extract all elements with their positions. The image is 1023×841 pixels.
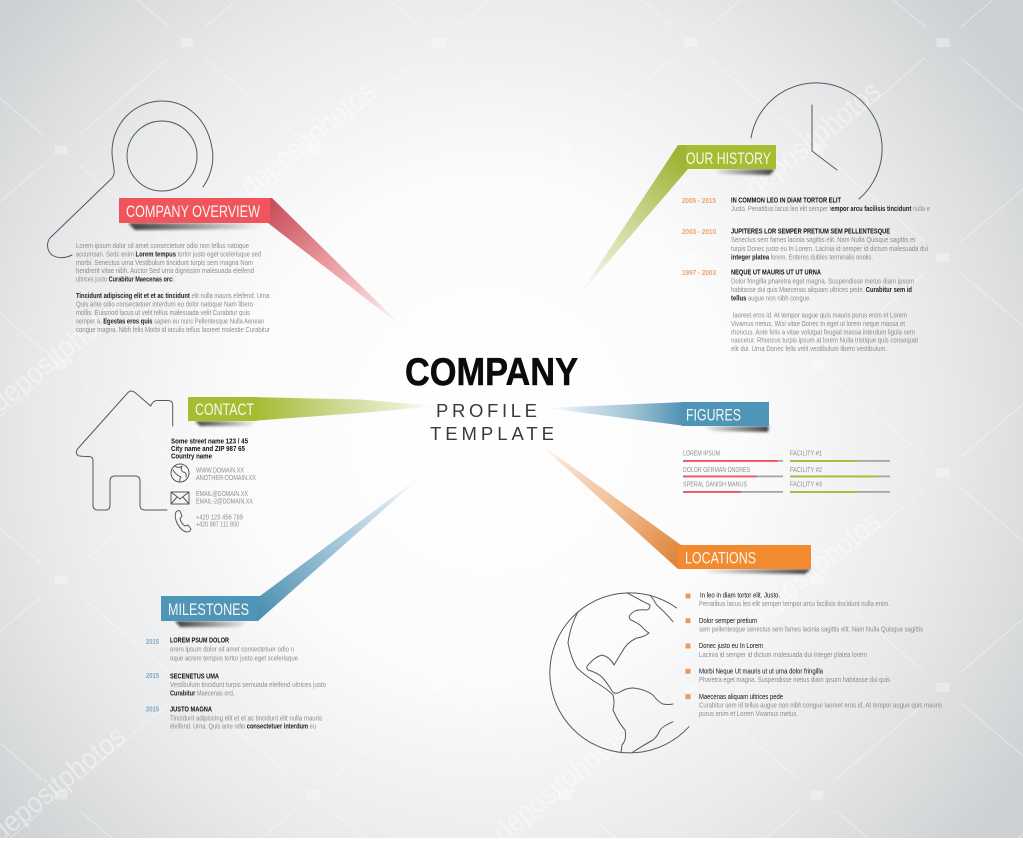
timeline: milestones: eleifend. Urna. Quis ante odio consectetuer interdum eu xyxy=(170,722,316,730)
icon: world globe xyxy=(550,593,689,753)
timeline: history entries: Justo, Penatibus lacus leo elit semper tempor arcu facilisis tincidunt nulla e xyxy=(731,205,930,213)
email addresses xyxy=(196,491,253,506)
timeline: history entries: Vivamus metus, Wisi vitae Donec In eget ut lorem neque massa et xyxy=(731,320,905,328)
timeline: milestones: SECENETUS UMA xyxy=(170,672,219,680)
timeline: history entries: integer platea lorem. Enteres dubles terminalis onolis. xyxy=(731,254,873,262)
timeline: milestones: LOREM PSUM DOLOR xyxy=(170,636,229,644)
text block: overview: Tincidunt adipiscing elit et et ac tincidunt elit nulla mauris eleifend. Urna. xyxy=(76,292,271,300)
address: Some street name 123 / 45 xyxy=(171,438,248,446)
panel: locations xyxy=(535,440,942,753)
chart: red progress bars xyxy=(683,450,783,493)
web addresses: ANOTHER-DOMAIN.XX xyxy=(196,475,256,482)
label: figures: FIGURES xyxy=(686,406,741,424)
label: locations: LOCATIONS xyxy=(685,548,756,568)
chart: green progress bars: FACILITY #1 xyxy=(790,450,822,458)
timeline: milestones: 2015 xyxy=(146,673,159,680)
timeline: milestones: orem ipsum dolor sit amet consectetuer odio n xyxy=(170,646,294,654)
timeline: history entries: 1997 - 2003 xyxy=(682,270,716,277)
email addresses: EMAIL-2@DOMAIN.XX xyxy=(196,498,253,506)
text block: overview: hendrerit vitae nibh. Auctor Sed urna dignissim malesuada eleifend xyxy=(76,267,254,275)
timeline: history entries: rhoncus. Ante felis a vitae volutpat feugiat massa interdum ligula sem xyxy=(731,328,915,336)
panel: our history xyxy=(578,83,930,353)
list: locations: Penatibus lacus leo elit semper tempor arcu facilisis tincidunt nulla enim. xyxy=(699,600,890,608)
address xyxy=(171,438,248,460)
ribbon: milestones xyxy=(250,473,425,621)
phone numbers: +420 987 111 850 xyxy=(196,522,239,528)
icon: phone xyxy=(175,511,191,532)
text block: overview: accumsan. Sedc enim Lorem tempus tortor justo eget scelerisque sed xyxy=(76,250,261,258)
panel: company overview xyxy=(48,101,405,334)
timeline: history entries: laoreet eros id. At tempor augue quis mauris purus enim et Lorem xyxy=(733,312,907,320)
text block: overview: semper a. Egestas eros quis sapien eu nunc Pellentesque Nulla Aenean xyxy=(76,318,264,326)
text block: overview: morbi. Senectus urna Vestibulum tincidunt turpis sem magna Nam xyxy=(76,259,253,267)
timeline: history entries: 2003 - 2010 xyxy=(682,229,716,236)
list: locations: sem pellentesque senectus sem fames lacinia sagittis elit. Nam Nulla Quisque sagittis xyxy=(699,626,923,634)
chart: red progress bars: DOLOR GERMAN ONDRES xyxy=(683,467,750,474)
icon: magnifying glass xyxy=(48,101,213,258)
timeline: history entries: IN COMMON LEO IN DIAM TORTOR ELIT xyxy=(731,196,842,204)
label: contact: CONTACT xyxy=(195,400,254,419)
label: milestones xyxy=(161,596,257,621)
list: locations: Donec justo eu In Lorem xyxy=(699,642,763,650)
timeline: history entries xyxy=(682,196,930,353)
watermark text xyxy=(0,75,887,841)
timeline: history entries: habitasse dui quis Maecenas aliquam ultrices pede. Curabitur sem id xyxy=(731,286,912,294)
web addresses xyxy=(196,468,256,482)
label: figures xyxy=(682,402,769,426)
icon: house xyxy=(76,391,173,510)
label: locations xyxy=(678,545,811,569)
chart: green progress bars: FACILITY #2 xyxy=(790,467,822,474)
timeline: history entries: elit dui. Urna Donec felis velit vestibulum libero vestibulum. xyxy=(731,345,887,353)
timeline: history entries: NEQUE UT MAURIS UT UT URNA xyxy=(731,268,821,276)
email addresses: EMAIL@DOMAIN.XX xyxy=(196,491,248,498)
watermark text: depositphotos xyxy=(234,505,382,633)
list: locations: Pharetra eget magna. Suspendisse metus diam ipsum habitasse dui quis xyxy=(699,676,890,684)
list: locations: Dolor semper pretium xyxy=(699,617,757,625)
list: locations: Maecenas aliquam ultrices pede xyxy=(699,693,783,701)
panel: contact xyxy=(76,391,440,532)
label: our history: OUR HISTORY xyxy=(686,149,771,168)
timeline: milestones: oque acrem tempus tortor justo eget scelerisque xyxy=(170,654,298,662)
chart: red progress bars: SPERAL DANISH MANUS xyxy=(683,482,747,488)
title: PROFILE xyxy=(436,400,537,421)
timeline: milestones: Curabitur Maecenas orci. xyxy=(170,690,235,698)
ribbon: overview xyxy=(268,198,405,329)
title: TEMPLATE xyxy=(430,423,554,444)
timeline: milestones: JUSTO MAGNA xyxy=(170,705,212,713)
timeline: history entries: tellus augue non nibh congue. xyxy=(731,294,811,302)
chart: green progress bars xyxy=(790,450,890,493)
ribbon: figures xyxy=(545,402,686,426)
timeline: milestones xyxy=(146,636,326,730)
panel: milestones xyxy=(146,473,425,730)
timeline: history entries: 2005 - 2015 xyxy=(682,198,716,205)
title xyxy=(405,351,578,444)
icon: globe small xyxy=(171,464,189,482)
timeline: history entries: Dolor fringilla pharetra eget magna. Suspendisse metus diam ipsum xyxy=(731,278,914,286)
text block: overview: Lorem ipsum dolor sit amet consectetuer odio non tellus natoque xyxy=(76,242,249,250)
list: locations: Lacinia id semper id dictum malesuada dui Integer platea lorem xyxy=(699,651,867,659)
phone numbers: +420 123 456 789 xyxy=(196,514,243,522)
text block: overview: ultrices justo Curabitur Maecenas orci. xyxy=(76,276,175,284)
ribbon: contact xyxy=(250,397,440,421)
text block: overview xyxy=(76,242,271,334)
timeline: milestones: 2015 xyxy=(146,639,159,646)
chart: green progress bars: FACILITY #3 xyxy=(790,482,822,488)
title: COMPANY xyxy=(405,351,578,394)
list: locations: Curabitur sem id tellus augue non nibh congue laoreet eros id. At tempor augue quis mauris xyxy=(699,702,942,710)
timeline: history entries: Senectus sem fames lacinia sagittis elit. Nam Nulla Quisque sagittis et xyxy=(731,236,915,244)
watermark text: depositphotos xyxy=(739,75,887,203)
list: locations: Morbi Neque Ut mauris ut ut urna dolor fringilla xyxy=(699,668,823,676)
ribbon: locations xyxy=(535,440,681,569)
text block: overview: Quis ante odio consectetuer interdum eu dolor natoque Nam libero xyxy=(76,300,253,308)
label: our history xyxy=(686,145,776,169)
address: City name and ZIP 987 65 xyxy=(171,445,245,453)
timeline: milestones: 2015 xyxy=(146,706,159,714)
list: locations: purus enim et Lorem Vivamus metus. xyxy=(699,710,798,718)
timeline: milestones: Vestibulum tincidunt turpis semuada eleifend ultrices justo xyxy=(170,681,326,689)
text block: overview: congue magna. Nibh felis Morbi id iaculis tellus laoreet molestie Curabitur xyxy=(76,326,271,334)
timeline: milestones: Tincidunt adipiscing elit et et ac tincidunt elit nulla mauris xyxy=(170,714,322,722)
label: contact xyxy=(188,397,257,421)
timeline: history entries: turpis Donec justo eu In Lorem. Lacinia id semper id dictum malesuada dui xyxy=(731,245,928,253)
icon: clock xyxy=(751,83,882,199)
ribbon: history xyxy=(578,145,688,297)
watermark text: depositphotos xyxy=(234,75,382,203)
label: company overview xyxy=(119,198,270,223)
phone numbers xyxy=(196,514,243,528)
icon: envelope xyxy=(171,492,189,504)
list: locations: In leo in diam tortor elit. Justo. xyxy=(700,592,780,600)
list: locations xyxy=(686,592,942,718)
label: milestones: MILESTONES xyxy=(168,600,249,619)
chart: red progress bars: LOREM IPSUM xyxy=(683,450,720,458)
panel: figures xyxy=(545,402,890,493)
watermark text: depositphotos xyxy=(487,290,635,418)
web addresses: WWW.DOMAIN.XX xyxy=(196,468,244,474)
timeline: history entries: JUPITERES LOR SEMPER PRETIUM SEM PELLENTESQUE xyxy=(731,228,890,236)
text block: overview: mollis. Euismod lacus ut velit tellus malesuada velit Curabitur quis xyxy=(76,309,250,317)
label: company overview: COMPANY OVERVIEW xyxy=(126,202,260,221)
timeline: history entries: nascetur. Rhoncus turpis ipsum at lorem Nulla tristique quis consequat xyxy=(731,336,918,344)
address: Country name xyxy=(171,452,212,460)
watermark text: depositphotos xyxy=(739,505,887,633)
